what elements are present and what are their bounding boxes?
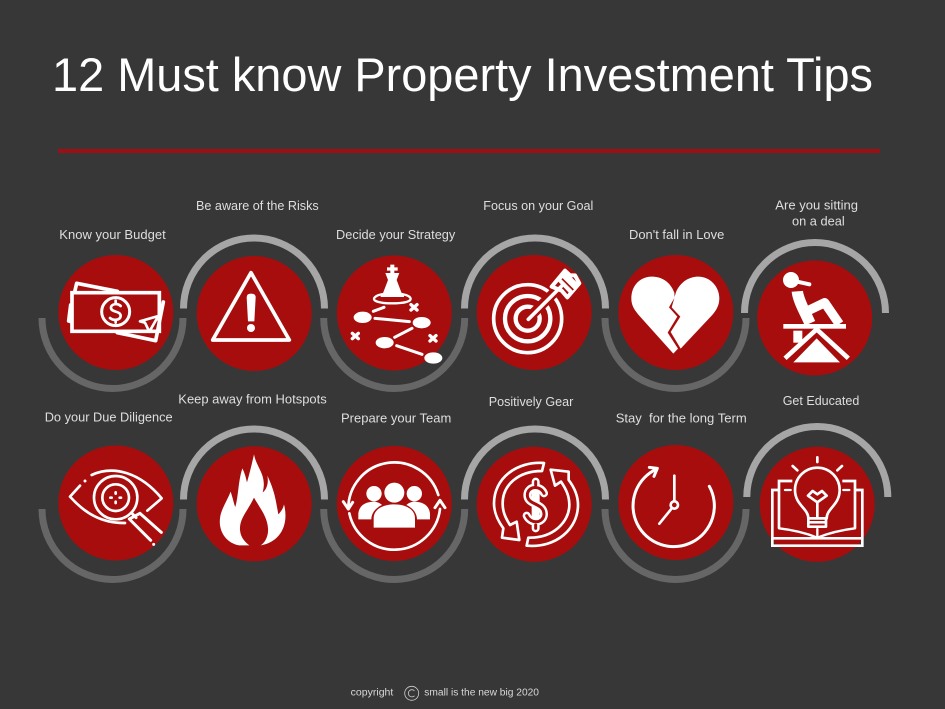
- tip: Know your Budget: [42, 227, 183, 388]
- upper ring arc: [464, 238, 606, 308]
- upper ring arc: [184, 429, 324, 500]
- lower ring arc: [324, 318, 465, 388]
- red disc: [757, 260, 872, 376]
- lower ring arc: [605, 318, 746, 388]
- red disc: [477, 447, 592, 562]
- icon: flame: [220, 454, 285, 546]
- tip: Are you sitting on a deal: [744, 198, 886, 376]
- red disc: [618, 255, 733, 370]
- copyright footer: [351, 686, 539, 700]
- label: Be aware of the Risks: [196, 198, 319, 213]
- icon: copyright symbol: [405, 686, 419, 700]
- tip: Focus on your Goal: [464, 198, 606, 370]
- icon: broken heart: [631, 277, 719, 354]
- icon: book and light bulb: [772, 457, 862, 546]
- label: Focus on your Goal: [483, 198, 593, 213]
- tip: Keep away from Hotspots: [178, 391, 327, 561]
- tip: Decide your Strategy: [324, 227, 465, 388]
- red disc: [58, 255, 173, 370]
- label: on a deal: [792, 214, 845, 229]
- lower ring arc: [605, 509, 746, 580]
- red disc: [197, 256, 312, 371]
- label: Keep away from Hotspots: [178, 391, 327, 406]
- icon: dollar cycle: [494, 463, 578, 546]
- label: Positively Gear: [489, 394, 574, 409]
- upper ring arc: [744, 242, 886, 313]
- upper ring arc: [464, 429, 606, 500]
- red disc: [337, 446, 452, 561]
- red disc: [197, 446, 312, 561]
- label: Stay for the long Term: [616, 411, 747, 426]
- title: 12 Must know Property Investment Tips: [52, 48, 873, 101]
- red disc: [618, 445, 733, 560]
- red disc: [337, 256, 452, 370]
- tip: Do your Due Diligence: [42, 410, 183, 580]
- label: Do your Due Diligence: [45, 410, 173, 425]
- red disc: [760, 447, 875, 562]
- tip: Stay for the long Term: [605, 411, 747, 580]
- label: Are you sitting: [775, 198, 858, 212]
- label: Get Educated: [783, 393, 859, 408]
- icon: chess king and plan: [352, 265, 442, 364]
- red disc: [477, 255, 592, 370]
- icon: eye and magnifier: [70, 471, 162, 546]
- icon: team in cycle: [343, 462, 445, 550]
- copyright footer: copyright: [351, 688, 394, 698]
- tip: Be aware of the Risks: [184, 198, 324, 371]
- copyright footer: small is the new big 2020: [424, 688, 539, 698]
- red disc: [58, 446, 173, 560]
- icon: target with arrow: [494, 271, 579, 353]
- tip: Don't fall in Love: [605, 227, 746, 388]
- tip: Positively Gear: [464, 394, 606, 562]
- upper ring arc: [184, 238, 324, 308]
- icon: warning triangle: [213, 273, 289, 340]
- tip: Prepare your Team: [324, 411, 465, 580]
- label: Don't fall in Love: [629, 227, 724, 242]
- lower ring arc: [42, 318, 183, 388]
- icon: person sitting on roof: [783, 272, 848, 362]
- tip: Get Educated: [747, 393, 888, 562]
- label: Decide your Strategy: [336, 227, 456, 242]
- icon: clock with arrow: [633, 467, 714, 547]
- label: [775, 198, 858, 229]
- lower ring arc: [324, 509, 465, 580]
- label: Prepare your Team: [341, 411, 451, 426]
- red divider rule: [58, 149, 880, 153]
- label: Know your Budget: [59, 227, 166, 242]
- icon: banknotes: [69, 283, 163, 341]
- upper ring arc: [747, 426, 888, 497]
- lower ring arc: [42, 509, 183, 580]
